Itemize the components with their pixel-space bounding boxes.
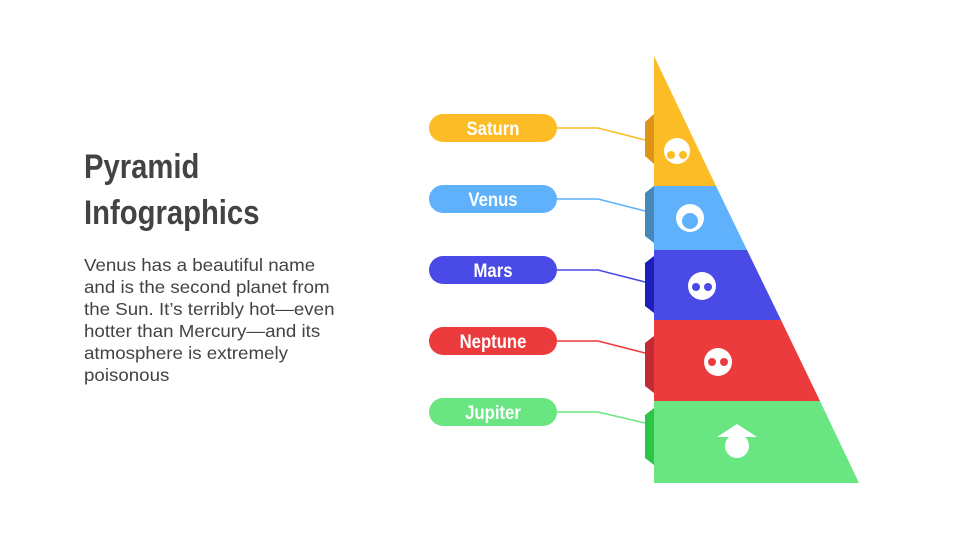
tier: Neptune: Neptune [460,331,526,352]
text block: and is the second planet from [84,277,330,297]
tier: Venus [429,185,747,250]
title [84,148,259,232]
title: Pyramid [84,148,199,186]
tier: Mars: Mars [474,260,513,281]
tier: Jupiter: Jupiter [465,402,521,423]
text block: atmosphere is extremely [84,343,288,363]
tier: Mars [429,250,781,320]
tier: Venus: Venus [468,189,518,210]
text block: Venus has a beautiful name [84,255,315,275]
title: Infographics [84,194,259,232]
text block: the Sun. It’s terribly hot—even [84,299,334,319]
text block: hotter than Mercury—and its [84,321,320,341]
tier: Saturn [429,56,716,186]
tier: Jupiter [429,398,859,483]
text block: poisonous [84,365,169,385]
text block [84,255,334,385]
tier: Saturn: Saturn [467,118,519,139]
tier: Neptune [429,320,820,401]
